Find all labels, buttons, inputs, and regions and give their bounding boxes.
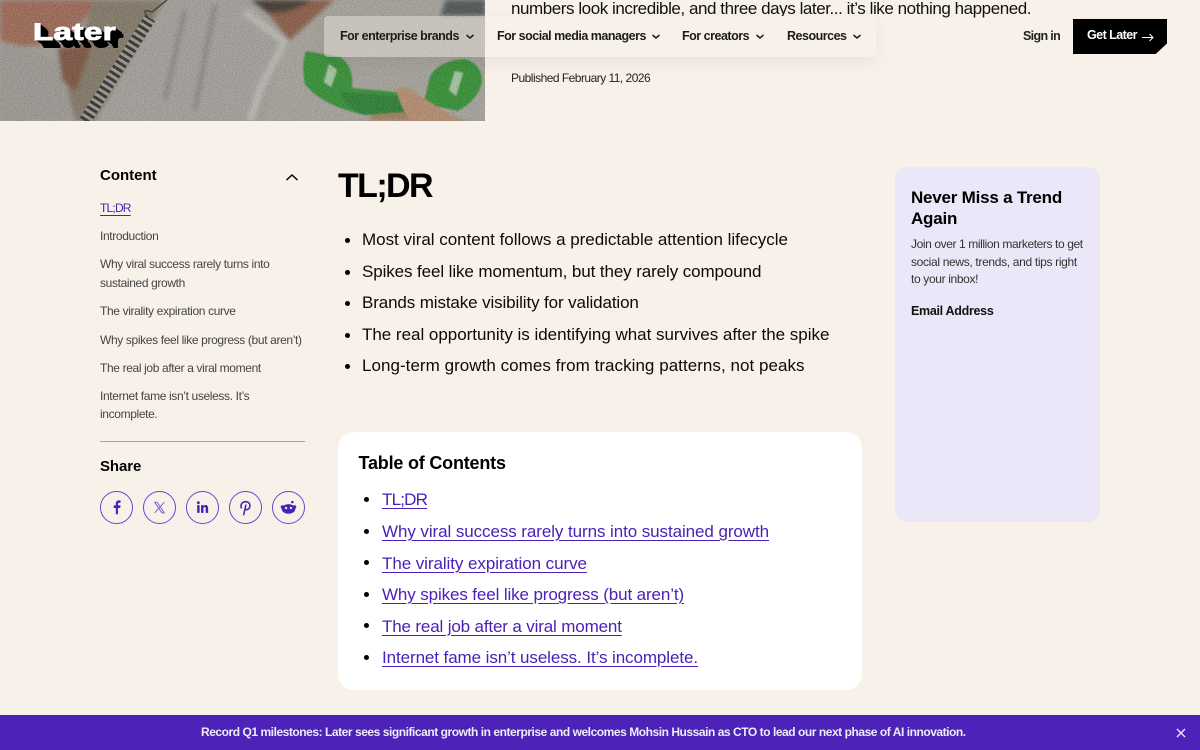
TL;DR bullets: Long-term growth comes from tracking patterns, not peaks <box>362 356 805 375</box>
hero photo <box>0 0 485 121</box>
panel: table of contents: Internet fame isn’t useless. It’s incomplete. <box>382 648 698 667</box>
newsletter heading: Never Miss a Trend <box>911 188 1062 207</box>
panel: newsletter signup: to your inbox! <box>911 272 978 286</box>
sidebar: contents <box>100 167 302 421</box>
icon: linkedin <box>186 491 219 524</box>
nav item: resources: Resources <box>787 29 847 43</box>
panel: table of contents: The virality expiration curve <box>382 554 587 573</box>
panel: table of contents: The real job after a viral moment <box>382 617 622 636</box>
sidebar: contents: Why spikes feel like progress (but aren’t) <box>100 333 302 347</box>
TL;DR bullets: The real opportunity is identifying what survives after the spike <box>362 325 829 344</box>
newsletter copy: Join over 1 million marketers to get <box>911 237 1083 251</box>
get later button: Get Later <box>1087 28 1137 42</box>
sidebar: contents: Why viral success rarely turns into <box>100 257 269 271</box>
nav chevrons <box>466 34 861 39</box>
TL;DR bullets: Most viral content follows a predictable attention lifecycle <box>362 230 788 249</box>
sidebar: contents: sustained growth <box>100 276 185 290</box>
icon: reddit <box>272 491 305 524</box>
panel: table of contents: TL;DR <box>382 490 427 509</box>
announcement bar <box>0 715 1200 750</box>
coiled cord <box>85 18 150 121</box>
sidebar: contents: Internet fame isn’t useless. It’s <box>100 389 249 403</box>
announcement text: Record Q1 milestones: Later sees significant growth in enterprise and welcomes Mohsin Hussain as CTO to lead our next phase of AI innovation. <box>201 725 966 739</box>
icon: close <box>1176 728 1186 738</box>
panel: table of contents <box>338 432 862 690</box>
sidebar: contents: The real job after a viral moment <box>100 361 261 375</box>
icon: facebook <box>100 491 133 524</box>
TL;DR bullets: Spikes feel like momentum, but they rarely compound <box>362 262 761 281</box>
panel: newsletter signup: Again <box>911 209 957 228</box>
sidebar heading: Content <box>100 167 157 184</box>
icon: x <box>143 491 176 524</box>
nav item: enterprise: For enterprise brands <box>340 29 459 43</box>
toc links <box>364 497 369 502</box>
navigation bar <box>324 16 876 57</box>
nav item: creators: For creators <box>682 29 749 43</box>
panel: newsletter signup: social news, trends, and tips right <box>911 255 1077 269</box>
heading: TL;DR: TL;DR <box>338 167 432 205</box>
nav item: social: For social media managers <box>497 29 646 43</box>
logo: Later <box>33 19 116 46</box>
sign in: Sign in <box>1023 29 1060 43</box>
panel: table of contents: Why spikes feel like progress (but aren’t) <box>382 585 684 604</box>
TL;DR bullets: Brands mistake visibility for validation <box>362 293 639 312</box>
TL;DR bullets <box>345 230 829 375</box>
link list: Introduction <box>100 229 158 243</box>
phone handset <box>303 51 482 121</box>
share icons <box>100 491 305 524</box>
share heading: Share <box>100 458 141 475</box>
toc heading: Table of Contents <box>358 453 506 473</box>
panel: table of contents: Why viral success rarely turns into sustained growth <box>382 522 769 541</box>
panel: newsletter signup <box>895 167 1100 522</box>
icon: pinterest <box>229 491 262 524</box>
publish date: Published February 11, 2026 <box>511 71 650 85</box>
collapse chevron <box>286 174 298 180</box>
sidebar: contents: The virality expiration curve <box>100 304 236 318</box>
active link: TL;DR <box>100 201 131 215</box>
get later button <box>1073 19 1167 54</box>
email label: Email Address <box>911 304 993 318</box>
sidebar: contents: incomplete. <box>100 407 157 421</box>
